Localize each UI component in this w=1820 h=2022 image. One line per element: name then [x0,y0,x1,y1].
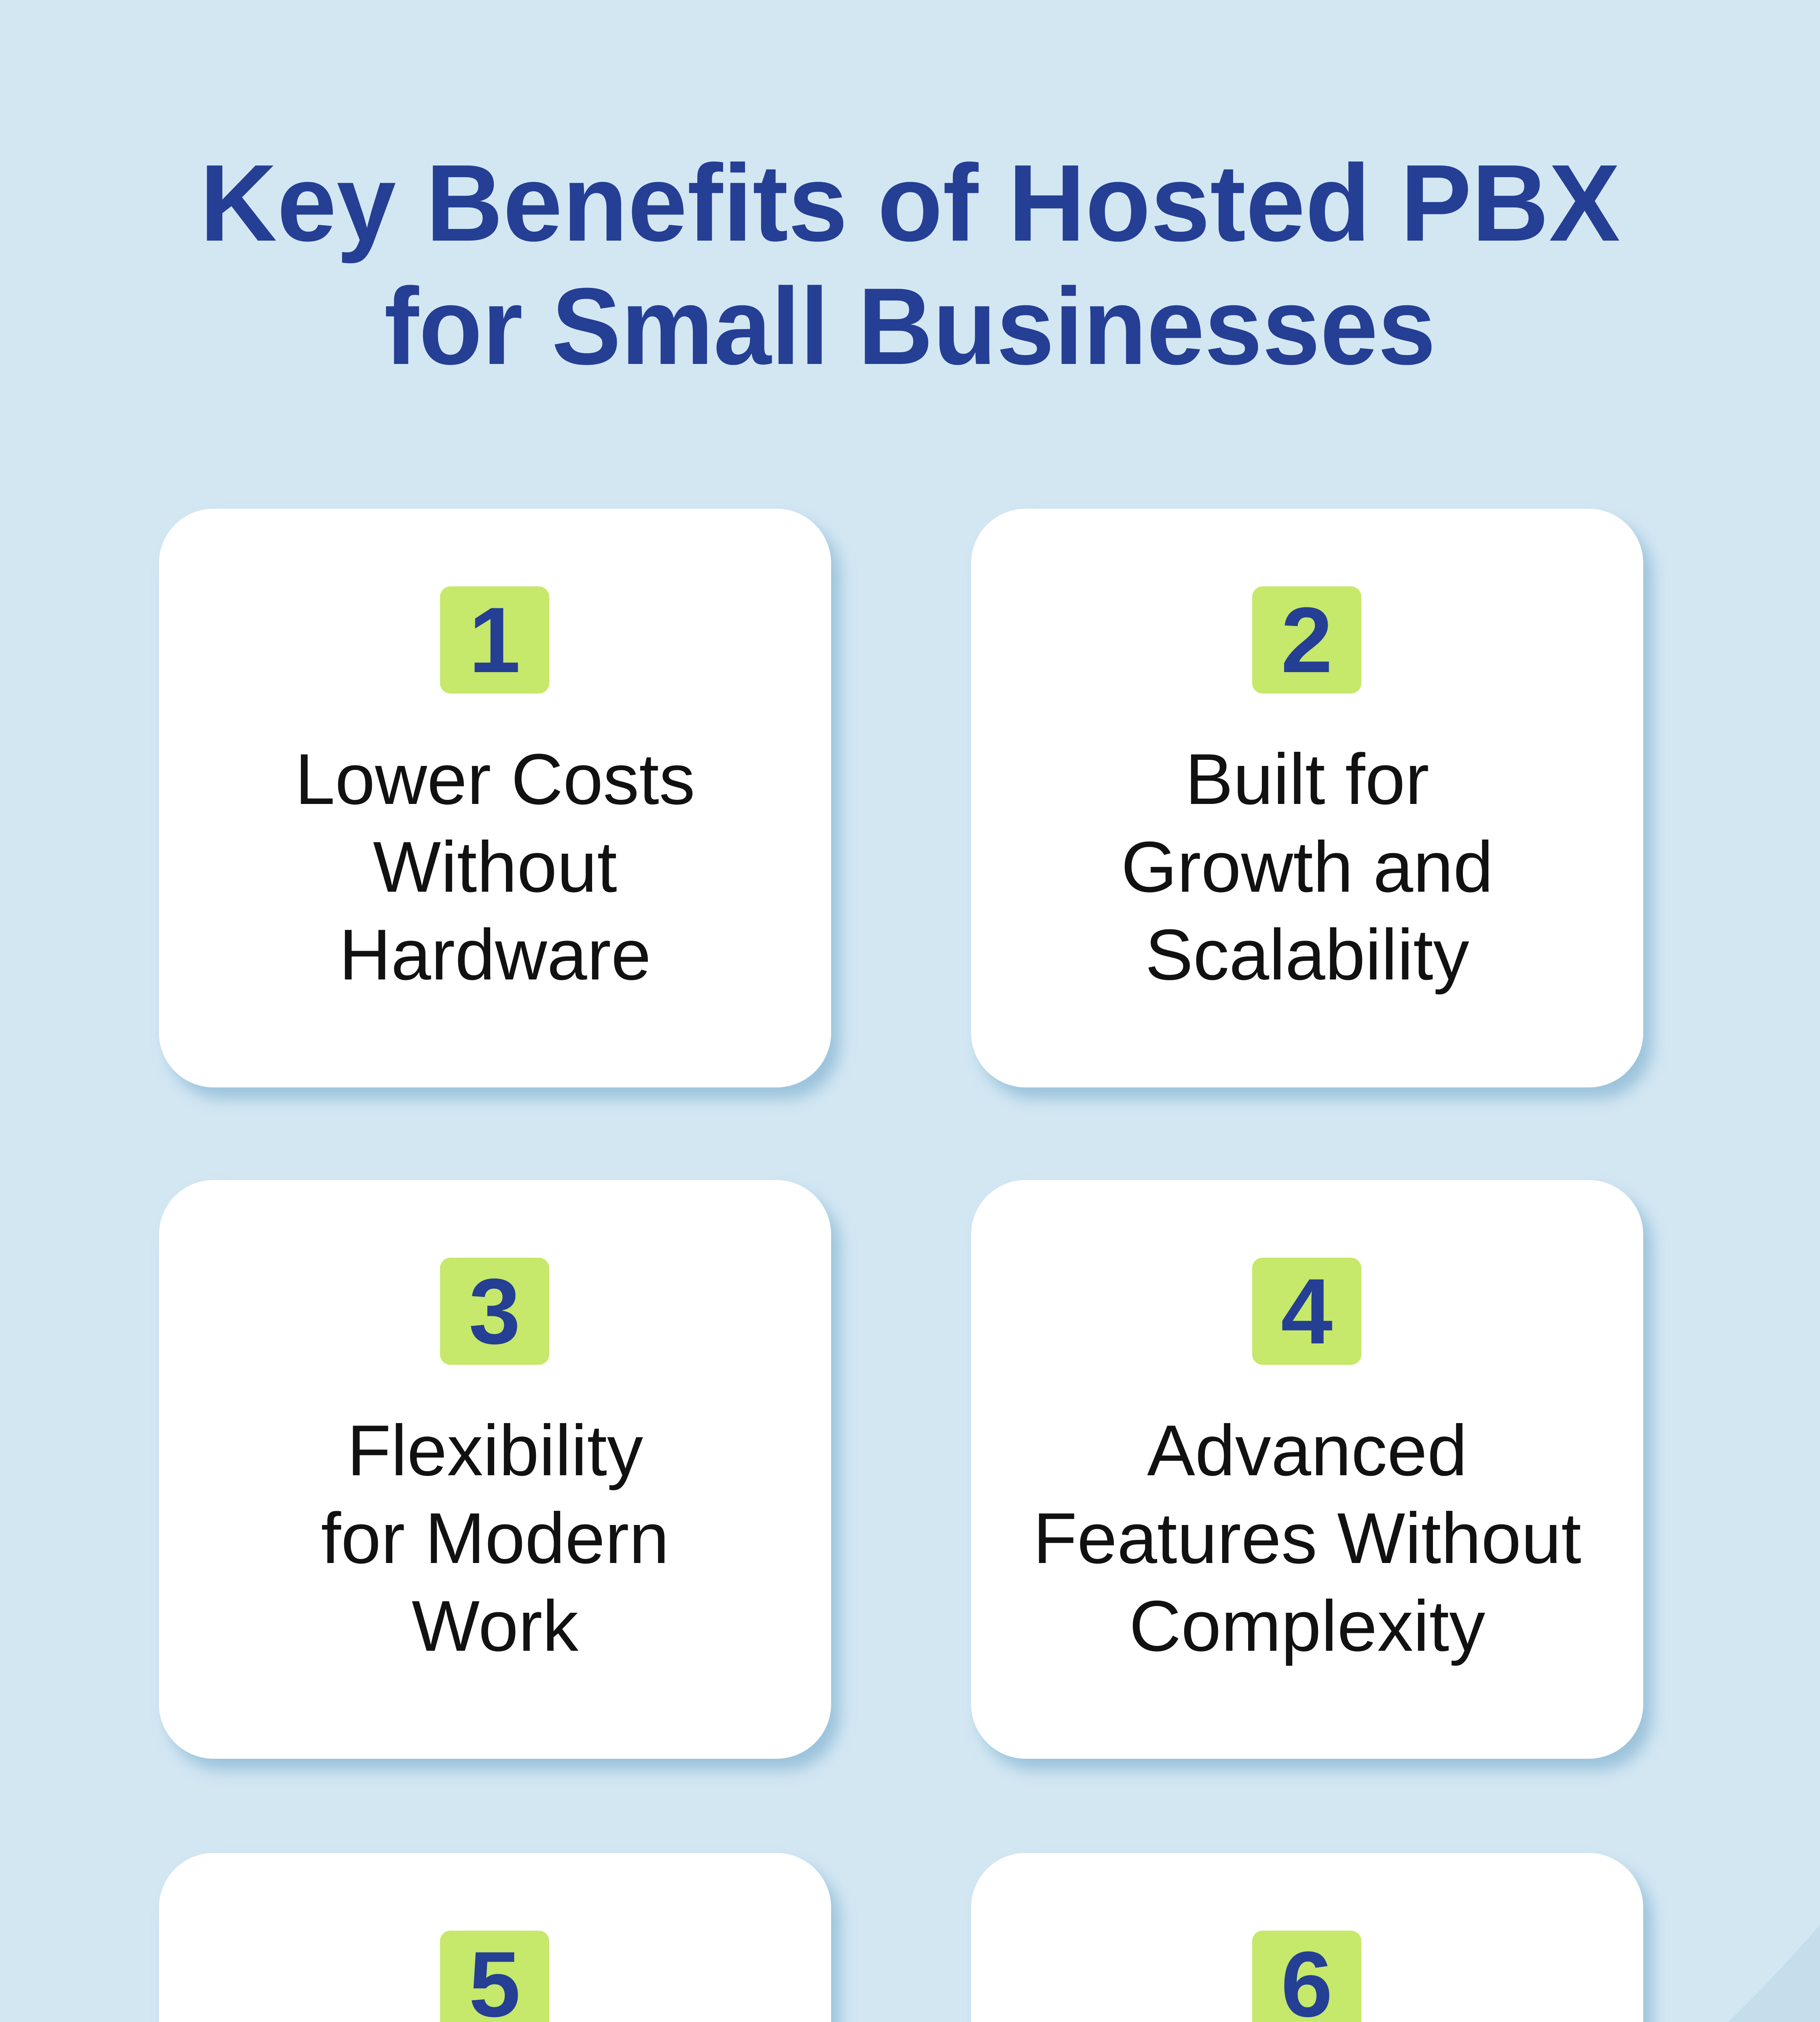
panel: card 1: Lower Costs [295,739,695,819]
panel: card 2 [971,509,1643,1087]
panel: card 5 [159,1853,831,2022]
title: for Small Businesses [384,266,1436,387]
panel: card 1: Without [373,827,617,907]
panel: card 3 [159,1180,831,1759]
panel: card 2: Built for [1185,739,1429,819]
panel: card 2: Scalability [1145,914,1469,995]
panel: card 3: Work [412,1586,578,1666]
panel: card 4 [971,1180,1643,1759]
panel: card 1: Hardware [339,914,651,995]
title [0,121,1820,404]
panel: card 3: for Modern [321,1498,669,1578]
panel: card 4: Advanced [1147,1410,1467,1491]
panel: card 1: 1 [469,588,521,692]
panel: card 2: 2 [1281,588,1333,692]
panel: card 3: 3 [469,1259,521,1363]
panel: card 2: Growth and [1121,827,1493,907]
panel: card 4: Complexity [1129,1586,1485,1666]
panel: card 1 [159,509,831,1087]
panel: card 6 [971,1853,1643,2022]
title: Key Benefits of Hosted PBX [200,142,1621,264]
panel: card 4: Features Without [1033,1498,1581,1578]
panel: card 4: 4 [1281,1259,1333,1363]
panel: card 3: Flexibility [347,1410,643,1491]
